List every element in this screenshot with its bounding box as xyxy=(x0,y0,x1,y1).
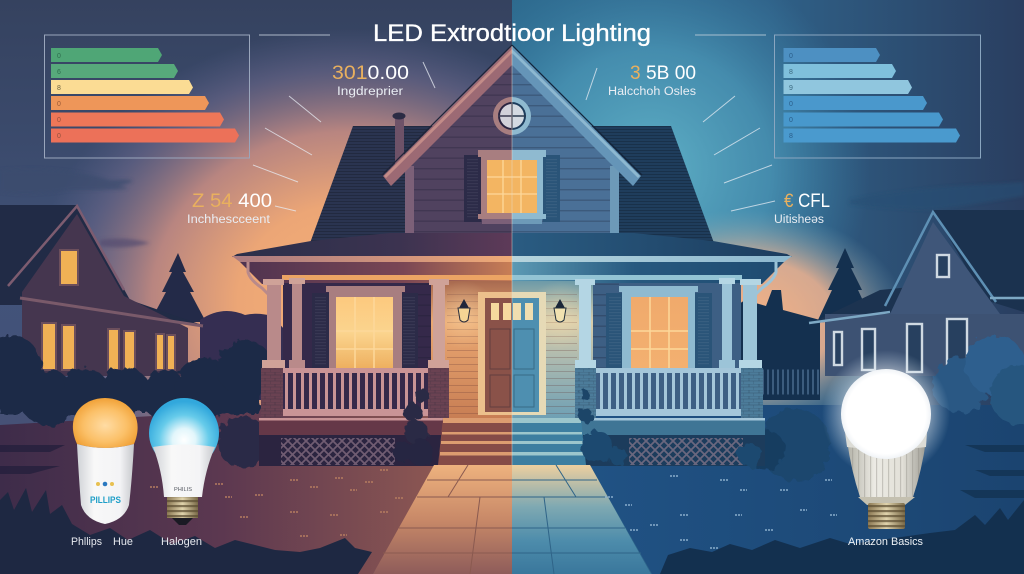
downspout xyxy=(248,262,268,294)
balustrade xyxy=(283,368,428,416)
warm neighbour windows xyxy=(42,250,175,370)
fence xyxy=(762,370,822,394)
entry wall siding, cool xyxy=(512,281,593,418)
cool bar C xyxy=(784,80,912,94)
walkway, cool xyxy=(512,465,651,574)
shrubs behind bulbs, warm side xyxy=(0,334,273,468)
warm bar C xyxy=(51,80,193,94)
gable barge board, cool xyxy=(512,45,642,186)
lower shutters xyxy=(312,293,418,368)
background trees, warm side xyxy=(150,253,285,400)
lawn, cool side xyxy=(585,405,1024,574)
wall lantern glow, cool xyxy=(526,281,594,349)
energy chart, warm side xyxy=(44,35,250,158)
warm bar E: 0 xyxy=(57,117,61,124)
stat: CFL: Uitisheəs xyxy=(774,214,824,226)
title: LED Extrodtioor Lighting xyxy=(373,20,651,47)
porch foundation xyxy=(259,432,443,466)
cool bar A: 0 xyxy=(789,53,793,60)
energy chart, cool side xyxy=(774,35,980,158)
rays, warm side xyxy=(253,62,435,211)
clouds xyxy=(0,169,1024,247)
warm bar D xyxy=(51,96,209,110)
bulb: Halogen: PHILIS xyxy=(174,487,192,493)
porch soffit xyxy=(240,262,512,284)
background trees, cool side xyxy=(730,248,872,400)
cool bar F: 8 xyxy=(789,133,793,140)
porch roof xyxy=(232,233,512,257)
stat: Halcchoh Osles xyxy=(608,63,696,98)
upper roof, cool xyxy=(592,126,714,241)
warm bar B: 6 xyxy=(57,69,61,76)
shrubs, cool side xyxy=(745,335,1024,481)
porch soffit, cool xyxy=(512,262,784,284)
stat: Ingdreprier: 3010.00 xyxy=(332,63,409,84)
front door, cool xyxy=(512,292,546,415)
downspout, cool xyxy=(756,262,776,294)
wall lantern, cool xyxy=(554,299,566,322)
lawn shadow bands, cool side xyxy=(960,445,1024,498)
upper roof xyxy=(310,126,512,243)
stat: Halcchoh Osles: 3 5B 00 xyxy=(630,63,696,84)
foreground grass, cool side xyxy=(660,500,1024,574)
brick plinths xyxy=(261,368,449,418)
front steps xyxy=(438,418,512,465)
bulb glow: Amazon Basics xyxy=(822,350,950,478)
chart leader line, warm side xyxy=(259,34,330,36)
round attic window xyxy=(493,97,531,135)
warm bar F: 0 xyxy=(57,133,61,140)
porch foundation, cool xyxy=(581,432,765,466)
cool bar E xyxy=(784,112,943,126)
gable wall xyxy=(405,60,512,236)
label: Halogen: Halogen xyxy=(161,536,202,548)
upper window, cool xyxy=(512,150,546,224)
porch columns, cool xyxy=(575,278,762,368)
warm bar C: 8 xyxy=(57,85,61,92)
warm bar E xyxy=(51,112,224,126)
wall lantern glow xyxy=(430,281,498,349)
upper shutters, cool xyxy=(543,155,560,222)
warm bar B xyxy=(51,64,178,78)
cool bar C: 9 xyxy=(789,85,793,92)
grass speckles, warm side xyxy=(150,470,404,536)
gable wall, cool xyxy=(512,66,613,233)
upper window xyxy=(478,150,512,224)
front steps, cool xyxy=(512,418,586,465)
neighbouring house, cool side xyxy=(809,210,1024,376)
house cool half xyxy=(493,45,792,574)
cool bar D xyxy=(784,96,927,110)
stat: CFL xyxy=(774,191,830,226)
front door xyxy=(478,292,512,415)
dusk sky background, cool side xyxy=(512,0,998,574)
fascia xyxy=(232,256,512,262)
centre divider xyxy=(511,46,513,465)
lattice, cool xyxy=(629,438,743,465)
cool bar D: 0 xyxy=(789,101,793,108)
round attic window, cool xyxy=(512,97,531,135)
foreground shrubs by the porch xyxy=(393,389,762,467)
brick plinths, cool xyxy=(575,368,763,418)
dark porch wall xyxy=(283,283,431,415)
bulb: Halogen xyxy=(149,398,219,525)
warm bar A xyxy=(51,48,162,62)
lower window xyxy=(326,286,405,368)
entry wall siding xyxy=(431,281,512,418)
warm bar A: 0 xyxy=(57,53,61,60)
porch deck, cool xyxy=(581,418,765,435)
fascia, cool xyxy=(512,256,792,262)
cool bar E: 0 xyxy=(789,117,793,124)
chart leader line, cool side xyxy=(695,34,766,36)
foreground grass, warm side xyxy=(0,488,372,574)
upper shutters xyxy=(464,155,481,222)
lattice xyxy=(281,438,395,465)
porch wall, cool xyxy=(593,283,741,415)
bulb: Amazon Basics xyxy=(841,369,931,529)
stat: CFL: € CFL xyxy=(784,191,830,212)
cool bar F xyxy=(784,128,960,142)
lawn shadow bands, warm side xyxy=(0,445,65,474)
stat: Halcchoh Osles: Halcchoh Osles xyxy=(608,86,696,98)
stat: Inchhescceent xyxy=(187,191,272,226)
porch deck xyxy=(259,418,443,435)
porch roof, cool xyxy=(512,233,792,257)
stat: Ingdreprier: Ingdreprier xyxy=(337,86,403,98)
lower window, cool xyxy=(619,286,698,368)
porch beam xyxy=(282,275,512,280)
stat: Inchhescceent: Z 54 400 xyxy=(192,191,272,212)
gable barge board xyxy=(382,45,512,186)
cool bar B: 8 xyxy=(789,69,793,76)
grass speckles, cool side xyxy=(605,476,837,548)
warm bar F xyxy=(51,128,239,142)
wall lantern xyxy=(458,299,470,322)
dusk sky background, warm side xyxy=(0,0,512,425)
porch columns xyxy=(262,278,449,368)
neighbouring house, warm side xyxy=(0,205,205,376)
cool neighbour windows xyxy=(834,255,967,374)
bulb: Philips Hue: PILLIPS xyxy=(90,495,121,505)
label: Amazon Basics: Amazon Basics xyxy=(848,536,923,548)
walkway xyxy=(373,465,512,574)
warm bar D: 0 xyxy=(57,101,61,108)
label: Philips Hue: Hue xyxy=(113,536,133,548)
rays, cool side xyxy=(586,68,775,211)
porch beam, cool xyxy=(512,275,742,280)
bulb: Philips Hue xyxy=(73,398,138,524)
balustrade, cool xyxy=(596,368,741,416)
stat: Ingdreprier xyxy=(332,63,409,98)
house warm half xyxy=(232,45,531,574)
lower shutters, cool xyxy=(606,293,712,368)
chimney xyxy=(392,112,406,164)
lawn, warm side xyxy=(0,405,445,574)
cool bar B xyxy=(784,64,896,78)
cool bar A xyxy=(784,48,880,62)
stat: Inchhescceent: Inchhescceent xyxy=(187,214,271,226)
label: Philips Hue: Phllips xyxy=(71,536,102,548)
